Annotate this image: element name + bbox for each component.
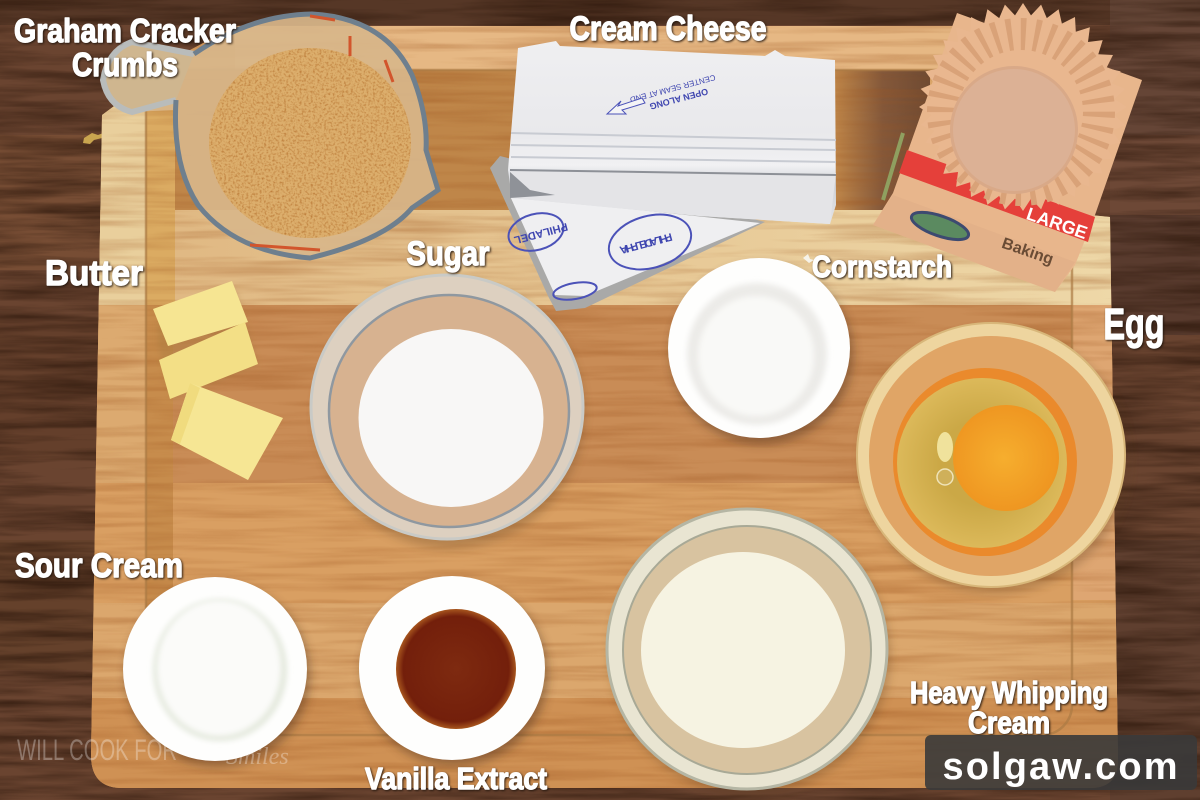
faint source watermark: WILL COOK FOR	[17, 734, 177, 767]
label: cream cheese: Cream Cheese	[570, 10, 766, 48]
lower package: PHILADEL	[512, 220, 569, 246]
site watermark badge: solgaw.com	[942, 746, 1178, 788]
cream cheese packages	[490, 41, 836, 311]
cup wall	[175, 14, 438, 258]
baking cups box and liner	[873, 3, 1142, 292]
baking cups box and liner: Baking	[999, 235, 1055, 268]
label: heavy whipping cream	[910, 675, 1108, 740]
cornstarch specks	[803, 254, 814, 263]
foil print: CENTER SEAM AT END	[629, 73, 716, 104]
label: cornstarch: Cornstarch	[812, 249, 952, 284]
butter cubes	[153, 281, 283, 480]
crumbs on table	[83, 132, 106, 144]
egg bowl	[857, 323, 1129, 593]
faint source watermark: Smiles	[226, 744, 289, 770]
label: heavy whipping cream: Cream	[968, 705, 1050, 740]
label: heavy whipping cream: Heavy Whipping	[910, 675, 1108, 710]
label: egg: Egg	[1104, 300, 1164, 349]
upper package	[508, 41, 836, 224]
label: vanilla extract: Vanilla Extract	[365, 761, 547, 796]
cup handle	[103, 42, 194, 112]
paper liner	[919, 3, 1127, 211]
site watermark badge	[925, 735, 1197, 790]
label: graham cracker crumbs: Graham Cracker	[14, 12, 236, 49]
label: sour cream: Sour Cream	[15, 547, 183, 585]
left rail and groove	[96, 100, 146, 305]
label: graham cracker crumbs	[14, 12, 236, 83]
lower package	[490, 156, 765, 311]
lower package: PHILADELPHIA	[618, 230, 673, 256]
foil print: OPEN ALONG	[648, 86, 709, 112]
juice groove outline	[146, 70, 1072, 735]
measuring cup with graham cracker crumbs	[102, 13, 438, 259]
label: graham cracker crumbs: Crumbs	[72, 46, 178, 83]
baking cups box and liner: LARGE	[1024, 204, 1090, 243]
label: butter: Butter	[45, 254, 143, 293]
vanilla extract ramekin	[359, 576, 548, 766]
sugar bowl	[311, 275, 584, 548]
red measure markings	[250, 16, 393, 250]
label: sugar: Sugar	[406, 235, 490, 273]
cornstarch ramekin	[668, 258, 853, 444]
sour cream ramekin	[123, 577, 310, 767]
heavy whipping cream bowl	[607, 509, 890, 795]
